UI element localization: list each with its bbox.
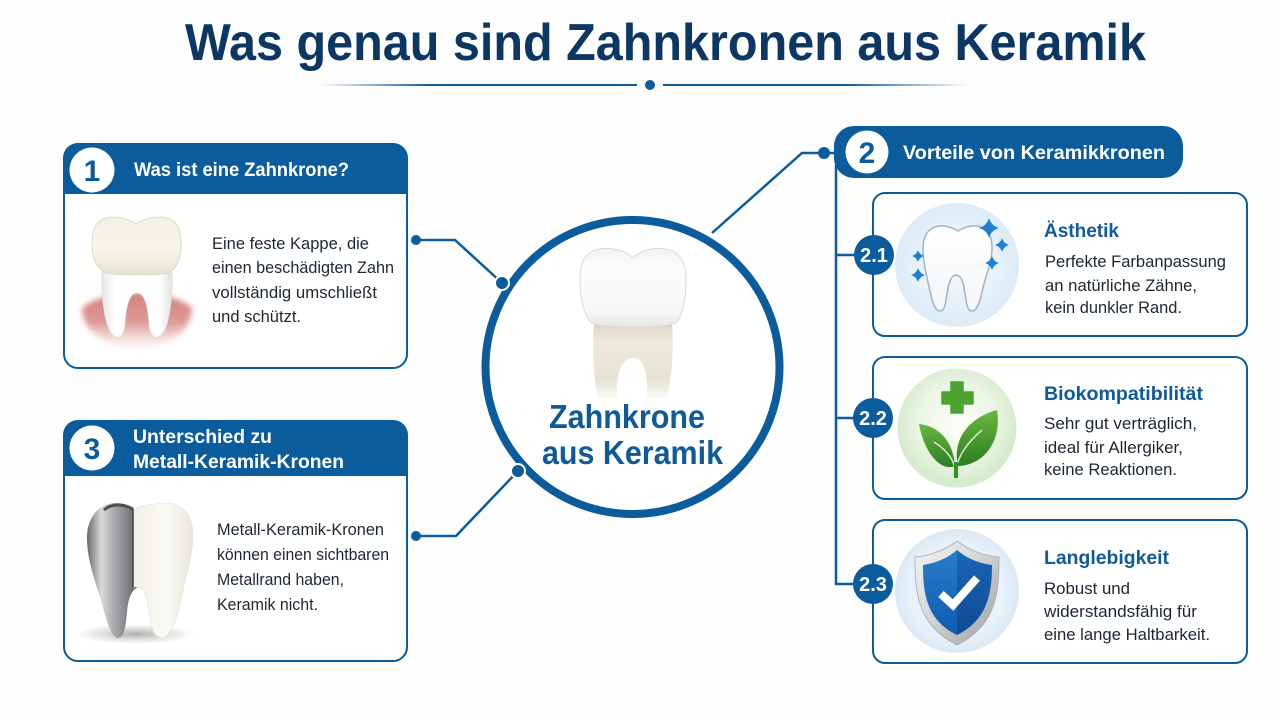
body text: Metall-Keramik-Kronen bbox=[217, 520, 384, 539]
number badge 2.1: 2.1 bbox=[860, 245, 888, 267]
number badge 2.1 bbox=[854, 235, 894, 275]
centre label: Zahnkrone bbox=[549, 398, 705, 435]
number badge 2: 2 bbox=[859, 137, 875, 170]
panel: Ästhetik bbox=[854, 193, 1247, 336]
number badge 2.3: 2.3 bbox=[859, 574, 887, 596]
node: lower left bbox=[511, 464, 525, 478]
card text: Perfekte Farbanpassung bbox=[1045, 252, 1226, 271]
connector: card 1 to centre bbox=[411, 235, 502, 283]
body text: können einen sichtbaren bbox=[217, 545, 389, 564]
panel header bbox=[64, 144, 407, 194]
connector: centre to section 2 bbox=[712, 147, 834, 233]
body text: vollständig umschließt bbox=[212, 283, 377, 302]
number badge 2.3 bbox=[853, 564, 893, 604]
panel: Vorteile header bbox=[834, 126, 1183, 178]
heading: Vorteile von Keramikkronen bbox=[903, 143, 1165, 164]
icon: half metal half ceramic tooth bbox=[75, 503, 195, 644]
icon: shield with check bbox=[895, 529, 1019, 653]
number badge 3 bbox=[70, 426, 114, 470]
panel: centre circle bbox=[486, 220, 780, 514]
number badge 2.2 bbox=[853, 398, 893, 438]
body text: Eine feste Kappe, die bbox=[212, 234, 369, 253]
panel header bbox=[64, 421, 407, 476]
card text: ideal für Allergiker, bbox=[1044, 438, 1183, 457]
connector: card 3 to centre bbox=[411, 471, 518, 541]
panel: Unterschied zu Metall-Keramik-Kronen bbox=[64, 421, 407, 661]
title: Was genau sind Zahnkronen aus Keramik bbox=[185, 14, 1146, 72]
card text: Biokompatibilität bbox=[1044, 384, 1204, 405]
heading bbox=[133, 427, 344, 473]
card text: an natürliche Zähne, bbox=[1045, 276, 1197, 295]
heading: Was ist eine Zahnkrone? bbox=[134, 160, 349, 181]
body text: einen beschädigten Zahn bbox=[212, 258, 394, 277]
icon: leaves with green cross bbox=[898, 368, 1016, 488]
number badge 2.2: 2.2 bbox=[859, 408, 887, 430]
card text: Robust und bbox=[1044, 579, 1130, 598]
card text: Ästhetik bbox=[1044, 221, 1119, 242]
icon: shining tooth bbox=[895, 203, 1019, 327]
body text bbox=[212, 234, 394, 326]
card text: kein dunkler Rand. bbox=[1045, 298, 1182, 317]
heading: Unterschied zu bbox=[133, 427, 272, 448]
number badge 3: 3 bbox=[84, 433, 100, 466]
card text: Langlebigkeit bbox=[1044, 548, 1170, 569]
icon: tooth with crown in gum bbox=[82, 217, 192, 348]
body text bbox=[217, 520, 389, 614]
number badge 1: 1 bbox=[84, 155, 100, 188]
icon: ceramic crown tooth bbox=[580, 248, 686, 398]
card text bbox=[1044, 384, 1204, 479]
body text: Metallrand haben, bbox=[217, 570, 344, 589]
connector: section 2 tree bbox=[836, 165, 873, 584]
card text: widerstandsfähig für bbox=[1043, 602, 1197, 621]
card text: keine Reaktionen. bbox=[1044, 460, 1177, 479]
body text: und schützt. bbox=[212, 307, 301, 326]
node: upper left bbox=[495, 276, 509, 290]
body text: Keramik nicht. bbox=[217, 595, 318, 614]
panel: Biokompatibilität bbox=[853, 357, 1247, 499]
number badge 1 bbox=[70, 148, 114, 192]
number badge 2 bbox=[846, 130, 888, 174]
card text: eine lange Haltbarkeit. bbox=[1044, 625, 1210, 644]
heading: Metall-Keramik-Kronen bbox=[133, 452, 344, 473]
title divider bbox=[320, 80, 968, 90]
card text bbox=[1044, 221, 1226, 317]
centre label: aus Keramik bbox=[542, 434, 724, 471]
card text bbox=[1043, 548, 1210, 644]
centre label bbox=[542, 398, 724, 471]
card text: Sehr gut verträglich, bbox=[1044, 414, 1197, 433]
panel: Was ist eine Zahnkrone bbox=[64, 144, 407, 368]
panel: Langlebigkeit bbox=[853, 520, 1247, 663]
